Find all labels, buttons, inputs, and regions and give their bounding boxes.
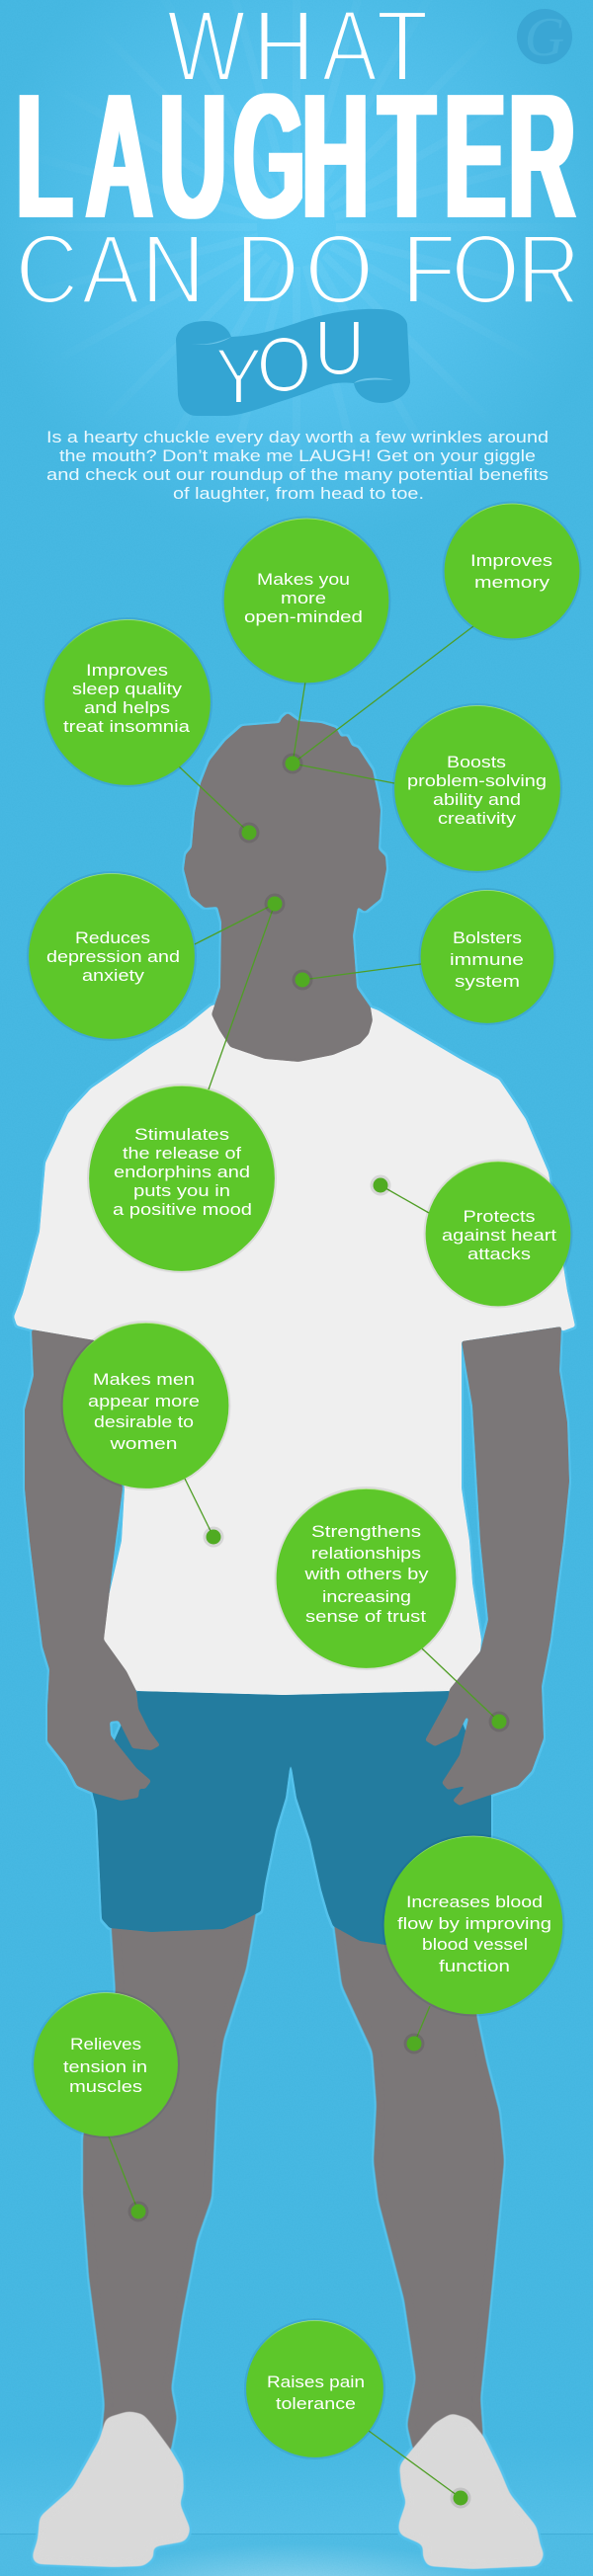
callout: pain: [244, 2318, 385, 2459]
callout: depression: [27, 871, 197, 1041]
callout: muscles: tension in: [63, 2058, 147, 2076]
title line: LAUGHTER: LAUGHTER: [16, 57, 575, 256]
right arm and hand: [425, 1327, 569, 1806]
callout: open-minded: [221, 516, 391, 685]
callout: blood flow: function: [439, 1958, 510, 1975]
callout: problem-solving: problem-solving: [407, 772, 547, 790]
intro text: of laughter, from head to toe.: [173, 485, 424, 503]
title line: CAN DO FOR: CAN DO FOR: [16, 214, 580, 324]
callout: open-minded: Makes you: [257, 571, 350, 589]
callout: blood flow: Increases blood: [406, 1893, 543, 1911]
callout: desirable: [61, 1321, 231, 1490]
callout: blood flow: blood vessel: [422, 1936, 528, 1954]
callout: endorphins: a positive mood: [113, 1201, 252, 1219]
callout: desirable: women: [109, 1435, 178, 1453]
left shoe: [32, 2411, 191, 2567]
callout: trust: sense of trust: [305, 1608, 426, 1626]
callout: immune: immune: [450, 951, 524, 969]
callout: sleep: [42, 617, 212, 787]
callout: heart: attacks: [467, 1246, 531, 1263]
head and neck: [184, 713, 386, 1062]
callout: endorphins: [87, 1084, 277, 1273]
t-shirt: [14, 988, 575, 1695]
left leg: [83, 1906, 257, 2455]
right leg: [333, 1916, 504, 2454]
title: [16, 0, 580, 324]
callout: open-minded: open-minded: [244, 608, 363, 626]
callout: memory: memory: [474, 574, 551, 592]
callout: endorphins: the release of: [123, 1145, 241, 1163]
callout: endorphins: endorphins and: [114, 1164, 250, 1181]
right shoe: [398, 2413, 545, 2569]
callout: trust: relationships: [311, 1545, 421, 1563]
human silhouette: [14, 713, 575, 2569]
callout: depression: depression and: [46, 948, 180, 966]
callout: problem-solving: creativity: [438, 810, 517, 828]
callout: sleep: Improves: [86, 662, 168, 680]
callout: problem-solving: [392, 703, 562, 873]
callout: problem-solving: ability and: [433, 791, 521, 809]
shorts: [92, 1691, 491, 1945]
callout: trust: with others by: [303, 1566, 429, 1583]
callout: sleep: and helps: [84, 699, 170, 717]
intro text: Is a hearty chuckle every day worth a few wrinkles around: [46, 429, 549, 446]
callout: pain: tolerance: [276, 2395, 356, 2413]
intro text: and check out our roundup of the many potential benefits: [46, 466, 549, 484]
callout: muscles: [32, 1990, 180, 2138]
callout: sleep: sleep quality: [72, 681, 183, 698]
callout: heart: against heart: [442, 1227, 556, 1245]
callout: desirable: appear more: [88, 1393, 200, 1410]
intro text: [46, 429, 549, 503]
callout: problem-solving: Boosts: [447, 754, 506, 771]
callout: memory: [443, 502, 581, 640]
callout: heart: Protects: [463, 1208, 536, 1226]
banner word: YOU: YOU: [215, 304, 365, 420]
callout: desirable: desirable to: [94, 1413, 194, 1431]
callout: immune: system: [455, 973, 520, 991]
callout: heart: [423, 1160, 573, 1308]
callout: endorphins: puts you in: [133, 1182, 230, 1200]
callout: blood flow: [381, 1833, 565, 2017]
marker dots: [128, 753, 510, 2509]
callout: trust: Strengthens: [311, 1523, 421, 1541]
connector lines: [109, 626, 499, 2498]
callout: muscles: Relieves: [70, 2036, 141, 2053]
callout: blood flow: flow by improving: [397, 1915, 551, 1933]
intro text: the mouth? Don’t make me LAUGH! Get on your giggle: [59, 447, 536, 465]
callout: trust: [275, 1487, 459, 1670]
callout: memory: Improves: [470, 552, 552, 570]
callout: depression: Reduces: [75, 929, 150, 947]
callout: sleep: treat insomnia: [63, 718, 191, 736]
logo badge: G: [525, 7, 564, 68]
callout: desirable: Makes men: [93, 1371, 195, 1389]
callout: immune: Bolsters: [453, 929, 522, 947]
callout: depression: anxiety: [82, 967, 145, 985]
callout: pain: Raises pain: [267, 2374, 365, 2391]
ribbon banner: [176, 304, 410, 420]
callout: endorphins: Stimulates: [134, 1126, 229, 1144]
callout: immune: [419, 888, 555, 1025]
callout: open-minded: more: [281, 590, 326, 607]
left arm and hand: [25, 1329, 160, 1801]
callout: trust: increasing: [322, 1588, 411, 1606]
callout: muscles: muscles: [69, 2078, 142, 2096]
